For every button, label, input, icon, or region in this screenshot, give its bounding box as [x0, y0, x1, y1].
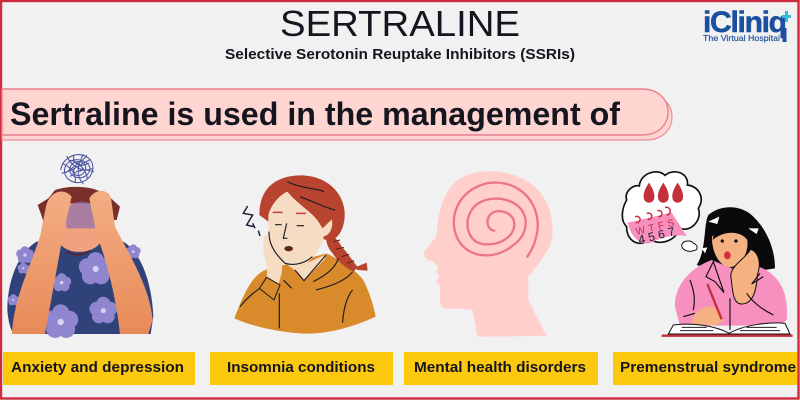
- hair: [697, 207, 775, 275]
- label: insomnia conditions: [210, 352, 393, 385]
- illustration: woman with premenstrual syndrome: W T F S: [635, 218, 676, 238]
- banner: management heading: [2, 89, 672, 140]
- illustration: person with anxiety and depression: [7, 154, 153, 338]
- logo: iCliniq: The Virtual Hospital: [703, 33, 780, 43]
- label: insomnia conditions: Insomnia conditions: [227, 359, 375, 376]
- label: premenstrual syndrome: [613, 352, 797, 385]
- open book: [668, 323, 790, 334]
- illustration: sleepy woman with insomnia: [234, 175, 376, 334]
- label: anxiety and depression: [3, 352, 195, 385]
- title: SERTRALINE: [280, 3, 520, 44]
- subtitle: Selective Serotonin Reuptake Inhibitors (SSRIs): [225, 46, 575, 63]
- label: mental health disorders: Mental health disorders: [414, 359, 586, 376]
- scribble above head: [61, 154, 94, 184]
- illustration: head with spiral, mental health: [424, 171, 553, 337]
- label: anxiety and depression: Anxiety and depression: [11, 359, 184, 376]
- braid: [326, 235, 357, 272]
- label: premenstrual syndrome: Premenstrual syndrome: [620, 359, 796, 376]
- banner text: Sertraline is used in the management of: [10, 96, 620, 132]
- illustration: woman with premenstrual syndrome: 4 5 6 7: [637, 224, 677, 247]
- illustration: woman with premenstrual syndrome: [622, 172, 793, 336]
- blouse: [675, 260, 787, 326]
- logo: iCliniq: iCliniq: [703, 6, 787, 39]
- thought bubble: [622, 172, 701, 243]
- face: [712, 229, 748, 267]
- label: mental health disorders: [404, 352, 598, 385]
